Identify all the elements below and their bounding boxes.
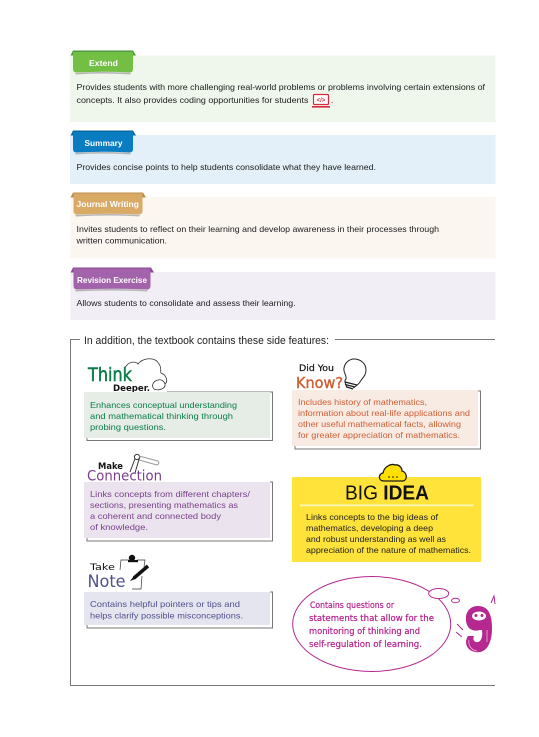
text: Think Deeper description: and mathematical thinking through [90, 411, 233, 421]
text: Make Connection description: a coherent and connected body [90, 511, 222, 521]
tab: Journal Writing: Journal Writing [76, 199, 139, 209]
panel: Extend [70, 50, 496, 122]
text: Journal Writing description: written communication. [75, 236, 167, 246]
title: Did You Know [296, 364, 343, 392]
text: thought bubble: Contains questions or [310, 601, 394, 611]
box [84, 392, 272, 440]
text: Make Connection description [90, 489, 251, 532]
title: BIG IDEA: BIG IDEA [345, 482, 429, 504]
title: Take Note: Note [88, 572, 126, 592]
icon: thought cloud [125, 359, 167, 390]
text: thought bubble [309, 601, 434, 650]
panel: Think Deeper [84, 359, 272, 440]
text: Big Idea description [306, 512, 471, 555]
title: Did You Know: Know? [296, 374, 343, 392]
text: Did You Know description: for greater appreciation of mathematics. [298, 430, 460, 440]
text: Journal Writing description: Invites students to reflect on their learning and develop awareness in their processes through [76, 224, 439, 234]
box [84, 592, 272, 628]
tab: Summary: Summary [84, 138, 123, 148]
text: Make Connection description: sections, presenting mathematics as [90, 500, 238, 510]
text: thought bubble: self-regulation of learning. [309, 640, 422, 650]
title: Take Note [88, 563, 126, 592]
text: Big Idea description: appreciation of the nature of mathematics. [306, 545, 471, 555]
box [84, 482, 272, 541]
text: Big Idea description: mathematics, developing a deep [306, 523, 433, 533]
text: Take Note description [90, 599, 243, 620]
text: Take Note description: Contains helpful pointers or tips and [90, 599, 240, 609]
title: Think Deeper: Think [87, 364, 132, 386]
title: Make Connection [87, 462, 162, 484]
panel: Big Idea [292, 464, 481, 562]
tab: Extend [70, 50, 136, 74]
text: Think Deeper description: Enhances conceptual understanding [90, 400, 237, 410]
text: Make Connection description: Links concepts from different chapters/ [90, 489, 251, 499]
text: thought bubble: statements that allow for the [309, 614, 434, 624]
text: Journal Writing description [75, 224, 439, 246]
text: Make Connection description: of knowledge. [90, 522, 148, 532]
icon: drawing compass [130, 454, 159, 473]
box [292, 390, 480, 449]
text: Did You Know description: other useful mathematical facts, allowing [298, 419, 461, 429]
thought bubble outline [293, 576, 460, 672]
icon: clipboard and pen [120, 555, 148, 589]
text: Extend description: . [331, 95, 333, 105]
side features frame [70, 340, 495, 686]
text: Extend description [76, 82, 486, 105]
panel: Revision Exercise [70, 268, 496, 320]
title: Think Deeper [87, 364, 150, 394]
text: Did You Know description: information about real-life applications and [298, 408, 470, 418]
tab: Extend: Extend [89, 58, 118, 68]
tab: Journal Writing [70, 192, 146, 216]
text: Revision Exercise description: Allows students to consolidate and assess their learning. [76, 298, 296, 308]
text: Take Note description: helps clarify possible misconceptions. [90, 610, 243, 620]
panel: Summary [70, 130, 496, 184]
text: Did You Know description [298, 397, 470, 440]
icon: yellow cloud [379, 464, 406, 481]
text: Big Idea description: Links concepts to the big ideas of [306, 512, 439, 522]
text: Extend description: Provides students with more challenging real-world problems or problems involving certain extensions of [76, 82, 486, 92]
title: Make Connection: Make [98, 462, 123, 472]
heading: side features intro: In addition, the textbook contains these side features: [84, 335, 329, 347]
text: thought bubble: monitoring of thinking and [309, 627, 420, 637]
panel: Take Note [84, 555, 272, 628]
text: Extend description: concepts. It also provides coding opportunities for students [76, 95, 308, 105]
icon: laptop code [312, 94, 330, 108]
panel: thought bubble [293, 576, 495, 672]
panel: Make Connection [84, 454, 272, 541]
text: Did You Know description: Includes history of mathematics, [298, 397, 427, 407]
tab: Revision Exercise [70, 268, 154, 292]
icon: magenta number nine [456, 596, 495, 652]
panel: Journal Writing [70, 192, 496, 258]
text: Think Deeper description [90, 400, 237, 432]
tab: Summary [70, 130, 136, 154]
panel: Did You Know [292, 359, 480, 449]
title: Make Connection: Connection [87, 468, 162, 484]
title: Take Note: Take [89, 563, 116, 573]
text: Big Idea description: and robust understanding as well as [306, 534, 446, 544]
icon: laptop code: </> [317, 98, 326, 104]
text: Summary description: Provides concise points to help students consolidate what they have learned. [76, 162, 376, 172]
title: Think Deeper: Deeper. [113, 384, 150, 394]
text: Think Deeper description: probing questions. [90, 422, 166, 432]
title: Did You Know: Did You [299, 364, 334, 374]
tab: Revision Exercise: Revision Exercise [77, 275, 147, 285]
icon: light bulb [344, 359, 366, 389]
